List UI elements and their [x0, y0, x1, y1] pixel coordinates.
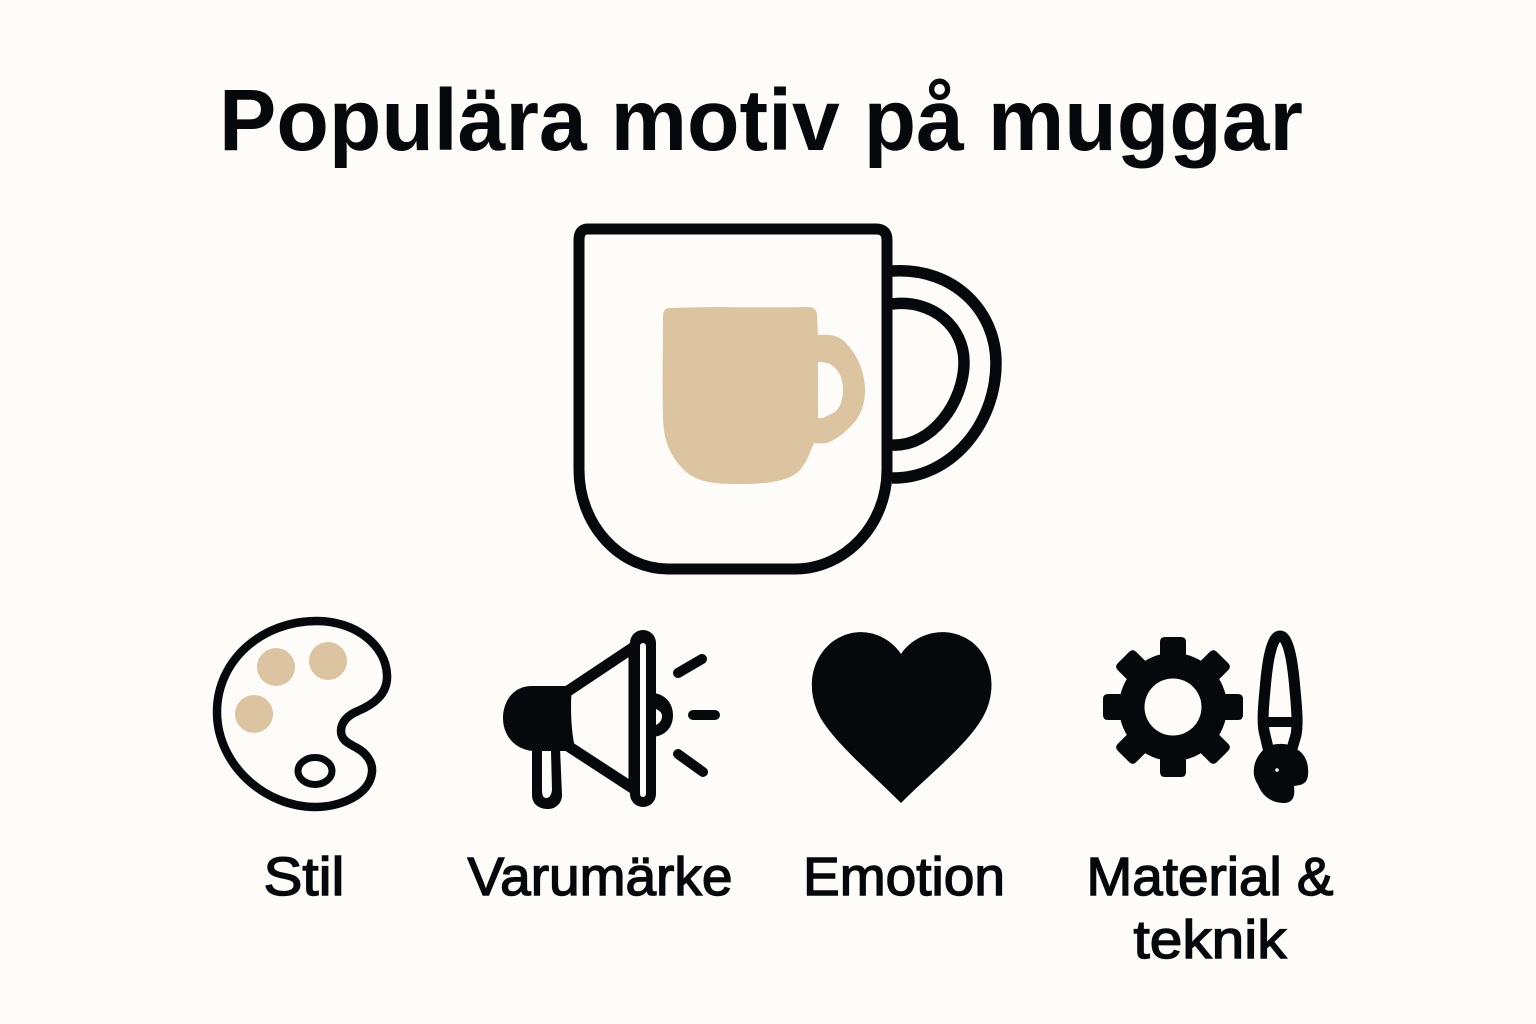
thumb hole — [298, 758, 332, 784]
mug handle outer — [892, 271, 996, 478]
label: Stil: Stil — [264, 847, 344, 907]
paint dots — [257, 648, 295, 686]
icon: palette — [217, 621, 387, 807]
icon: gear and brush — [1103, 636, 1308, 803]
label: Emotion: Emotion — [803, 847, 1005, 907]
paintbrush dot — [1275, 768, 1279, 772]
megaphone rim — [630, 630, 656, 807]
paintbrush band — [1265, 717, 1295, 727]
paintbrush tip — [1254, 744, 1308, 803]
palette outline — [217, 621, 387, 807]
megaphone lens — [654, 693, 673, 737]
label: Varumärke: Varumärke — [468, 847, 732, 907]
label: Material & teknik: teknik — [1134, 910, 1288, 970]
mug body outline — [579, 229, 887, 569]
label: Material & teknik — [1086, 847, 1334, 970]
sound lines — [678, 659, 715, 772]
icon: megaphone — [503, 630, 715, 809]
title: Populära motiv på muggar — [219, 72, 1303, 169]
paintbrush bristles — [1263, 636, 1297, 752]
megaphone handle — [532, 748, 562, 809]
gear — [1103, 637, 1243, 777]
megaphone cone — [568, 647, 634, 789]
megaphone back — [503, 686, 576, 751]
small beige mug motif — [663, 307, 865, 484]
mug handle inner — [892, 303, 964, 445]
icon: central mug — [579, 229, 996, 569]
label: Material & teknik: Material & — [1086, 847, 1334, 907]
icon: heart — [812, 632, 992, 803]
